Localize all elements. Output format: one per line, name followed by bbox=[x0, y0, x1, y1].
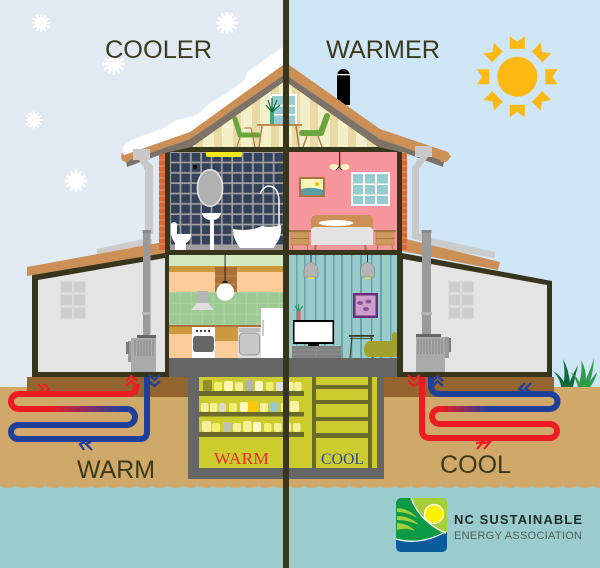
heading: cooler: COOLER bbox=[105, 36, 212, 64]
heat pump unit left bbox=[126, 230, 156, 372]
downspout left bbox=[133, 149, 153, 234]
arrows: right loop bbox=[408, 375, 531, 449]
framed picture bbox=[299, 177, 325, 197]
refrigerator bbox=[261, 308, 283, 358]
hanging lamp right bbox=[360, 255, 374, 279]
background: warmer sky bbox=[285, 0, 600, 400]
hanging lamp left bbox=[304, 255, 318, 279]
mirror bbox=[197, 170, 223, 206]
attic window bbox=[270, 94, 297, 124]
nightstand left bbox=[289, 230, 311, 250]
house structure bbox=[165, 147, 402, 377]
shelves with jars bbox=[199, 380, 304, 437]
ground loop right bbox=[408, 375, 558, 449]
left wing of house bbox=[27, 239, 169, 377]
icon: chimney bbox=[337, 69, 350, 105]
television bbox=[293, 320, 334, 346]
downspout right bbox=[412, 146, 432, 245]
arrows: left loop bbox=[38, 375, 160, 450]
range hood bbox=[191, 291, 214, 310]
icon: sun bbox=[477, 36, 558, 117]
logo: NC Sustainable Energy Association bbox=[396, 498, 582, 552]
brick strip right bbox=[402, 153, 407, 250]
label: basement cool: COOL bbox=[321, 451, 364, 468]
window: right wing bbox=[448, 281, 474, 319]
bathtub bbox=[233, 225, 281, 248]
center divider bbox=[283, 0, 289, 568]
attic chair left bbox=[235, 119, 258, 147]
groundwater bbox=[0, 480, 600, 568]
attic table with plant bbox=[257, 98, 302, 147]
plant vase bbox=[295, 304, 303, 321]
purple picture bbox=[353, 293, 378, 318]
room: kitchen bbox=[169, 255, 283, 358]
sofa bbox=[364, 332, 397, 357]
ceiling lamp bbox=[330, 152, 350, 170]
oven bbox=[192, 327, 215, 358]
basement bbox=[169, 358, 397, 479]
ground bbox=[0, 387, 600, 488]
background: cooler sky bbox=[0, 0, 285, 400]
pendant lamp bbox=[216, 255, 234, 301]
ladder rack bbox=[312, 377, 372, 468]
sink bbox=[202, 213, 221, 250]
right wing of house bbox=[402, 238, 552, 377]
attic bbox=[192, 82, 378, 147]
attic chair right bbox=[302, 116, 327, 147]
room: bathroom bbox=[170, 152, 283, 250]
room: bedroom bbox=[289, 152, 397, 250]
label: warm ground: WARM bbox=[77, 456, 155, 484]
side table bbox=[349, 335, 374, 358]
heading: warmer: WARMER bbox=[326, 36, 440, 64]
logo text line 1: NC SUSTAINABLE bbox=[454, 512, 582, 527]
brick strip left bbox=[159, 153, 165, 250]
media cabinet bbox=[292, 346, 341, 358]
ground loop left bbox=[11, 375, 160, 450]
window bbox=[351, 172, 390, 206]
heat pump unit right bbox=[416, 230, 451, 372]
bed bbox=[311, 215, 373, 250]
icon: grass bbox=[553, 358, 597, 387]
snowflakes bbox=[26, 12, 238, 192]
toilet bbox=[171, 222, 191, 250]
snow on roof bbox=[122, 47, 283, 155]
room: living room bbox=[289, 255, 397, 358]
roof bbox=[121, 62, 451, 167]
window: left wing bbox=[60, 281, 86, 319]
foundation soil bbox=[27, 377, 554, 397]
nightstand right bbox=[374, 230, 396, 250]
logo mark bbox=[396, 498, 447, 552]
label: cool ground: COOL bbox=[440, 451, 511, 479]
light fixture bbox=[206, 152, 242, 157]
logo text line 2: ENERGY ASSOCIATION bbox=[454, 530, 582, 542]
washer bbox=[238, 327, 261, 358]
label: basement warm: WARM bbox=[214, 449, 269, 468]
